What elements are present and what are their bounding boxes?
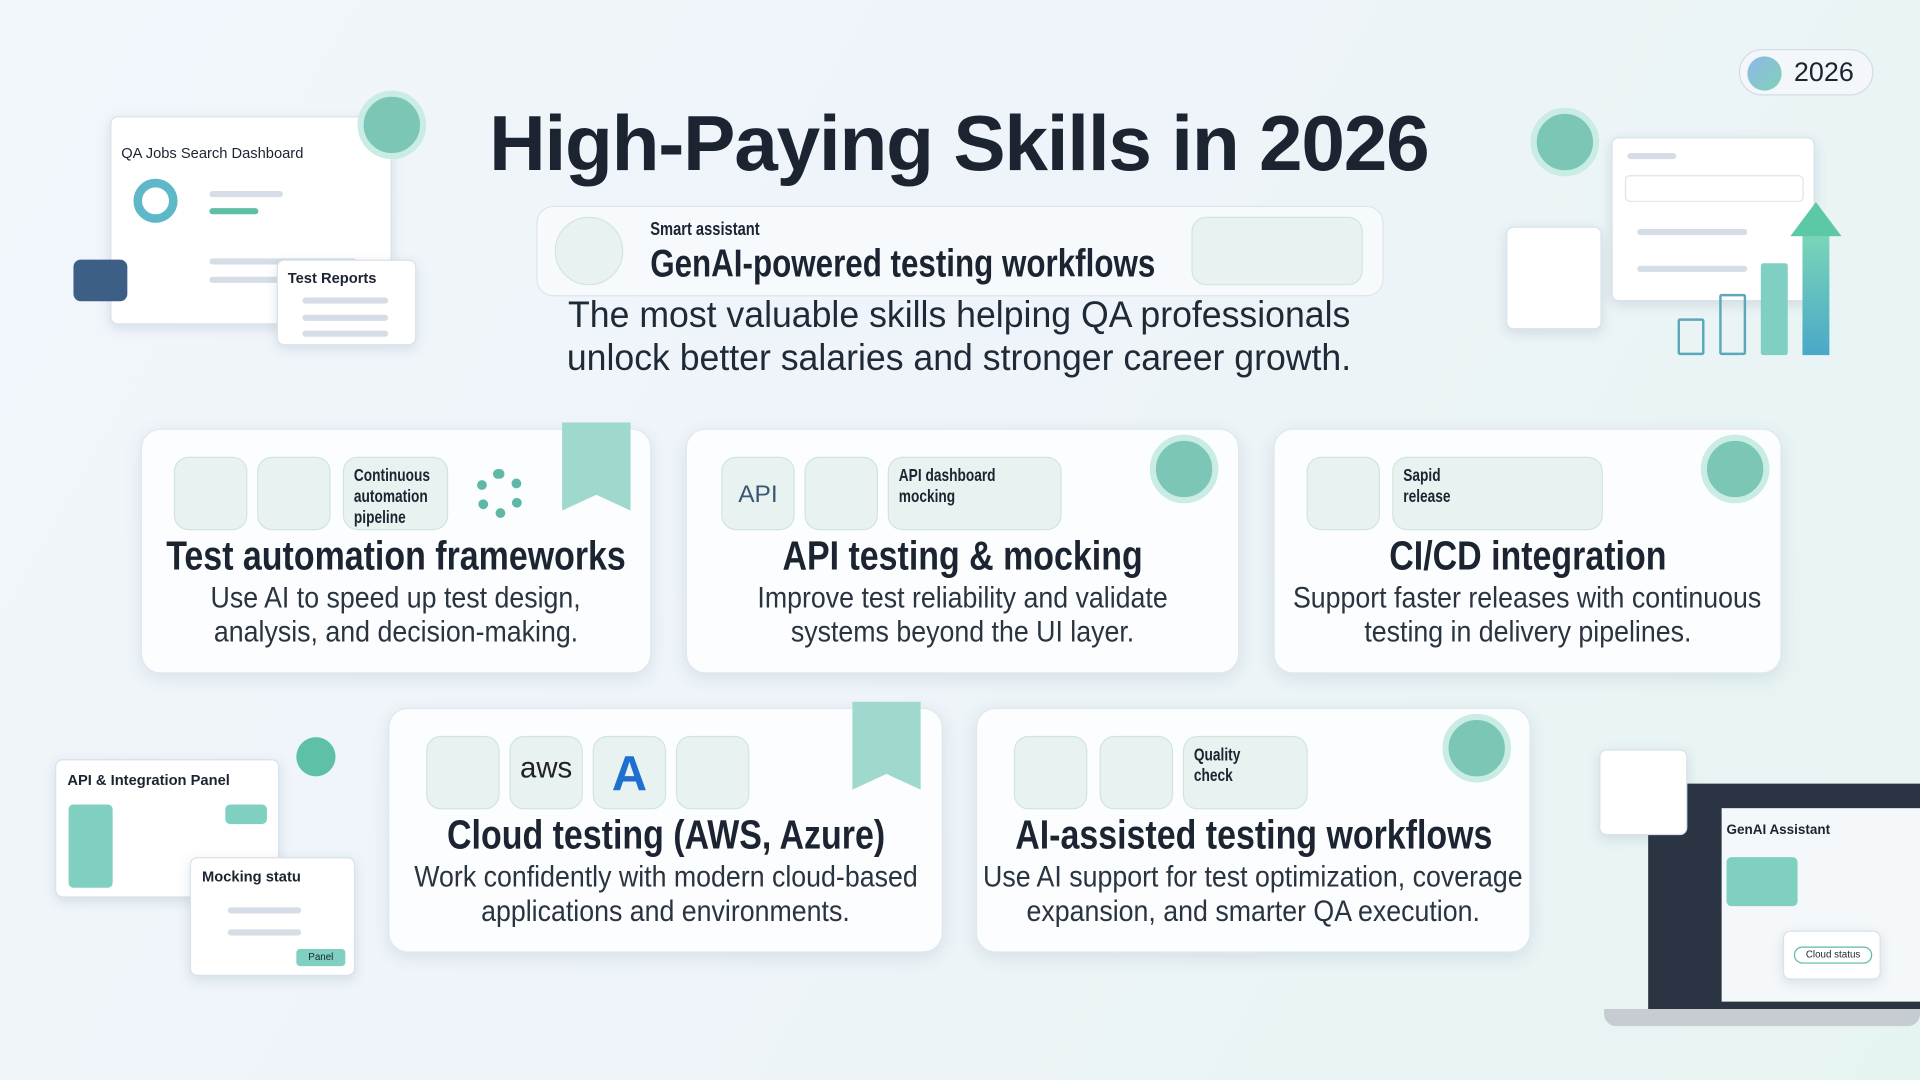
panel: test automation: pipeline <box>354 507 406 527</box>
panel: test automation: Use AI to speed up test design, <box>211 582 581 615</box>
panel: CI/CD: Support faster releases with continuous <box>1293 582 1762 615</box>
panel: API testing: Improve test reliability and validate <box>757 582 1168 615</box>
panel: AI-assisted: expansion, and smarter QA execution. <box>1027 895 1480 928</box>
panel: test automation: automation <box>354 486 428 506</box>
header panel <box>536 206 1384 296</box>
panel: CI/CD: testing in delivery pipelines. <box>1364 616 1691 649</box>
text: Panel <box>308 951 333 962</box>
panel: test automation: Continuous <box>354 465 430 485</box>
panel: cloud testing <box>388 708 943 953</box>
panel: cloud testing: aws <box>520 752 572 785</box>
panel: AI-assisted: Quality <box>1194 744 1240 764</box>
panel: API testing: systems beyond the UI layer. <box>791 616 1134 649</box>
badge: 2026 <box>1739 49 1873 96</box>
panel: CI/CD: Sapid <box>1403 465 1441 485</box>
panel: AI-assisted: AI-assisted testing workflows <box>1015 812 1492 857</box>
icon: workflow <box>1191 217 1363 285</box>
panel: API testing: API testing & mocking <box>782 533 1143 578</box>
panel: cloud testing: Work confidently with modern cloud-based <box>414 861 917 894</box>
chart: growth bars <box>1678 202 1842 356</box>
decoration: test reports: Test Reports <box>288 269 376 287</box>
icon: brain <box>555 217 623 285</box>
panel: API testing: API dashboard <box>899 465 996 485</box>
decoration: laptop: GenAI Assistant <box>1727 823 1830 838</box>
decoration: API integration panel: API & Integration Panel <box>67 771 230 789</box>
header heading: GenAI-powered testing workflows <box>650 241 1155 285</box>
subtitle: unlock better salaries and stronger career growth. <box>567 338 1351 378</box>
panel: CI/CD: CI/CD integration <box>1389 533 1666 578</box>
decoration: top-right mockup <box>1611 137 1815 301</box>
decoration: laptop <box>1648 784 1920 1014</box>
panel: cloud testing: applications and environments. <box>481 895 850 928</box>
decoration: test reports <box>277 260 416 345</box>
decoration: QA dashboard: QA Jobs Search Dashboard <box>121 144 303 162</box>
icon: briefcase <box>73 260 127 301</box>
panel: CI/CD: release <box>1403 486 1451 506</box>
panel: test automation <box>141 429 651 673</box>
panel: CI/CD <box>1273 429 1782 673</box>
panel: API testing: API <box>738 481 778 508</box>
title: High-Paying Skills in 2026 <box>489 99 1428 187</box>
decoration: QA dashboard <box>110 116 392 324</box>
panel: API testing <box>686 429 1239 673</box>
panel: AI-assisted: Use AI support for test optimization, coverage <box>983 861 1523 894</box>
panel: cloud testing: A <box>612 747 647 801</box>
panel: test automation: Test automation frameworks <box>166 533 626 578</box>
subtitle <box>567 295 1351 378</box>
header label: Smart assistant <box>650 219 760 240</box>
badge: 2026: 2026 <box>1794 56 1854 87</box>
panel: cloud testing: Cloud testing (AWS, Azure) <box>446 812 885 857</box>
panel: AI-assisted: check <box>1194 765 1233 785</box>
decoration: API integration panel <box>55 759 279 898</box>
text: Mocking statu <box>202 868 301 885</box>
panel: test automation: analysis, and decision-making. <box>214 616 578 649</box>
panel: API testing: mocking <box>899 486 955 506</box>
decoration: laptop: Cloud status <box>1806 949 1860 960</box>
icon: medal top-left <box>358 91 426 159</box>
panel: AI-assisted <box>976 708 1531 953</box>
subtitle: The most valuable skills helping QA professionals <box>568 295 1350 336</box>
